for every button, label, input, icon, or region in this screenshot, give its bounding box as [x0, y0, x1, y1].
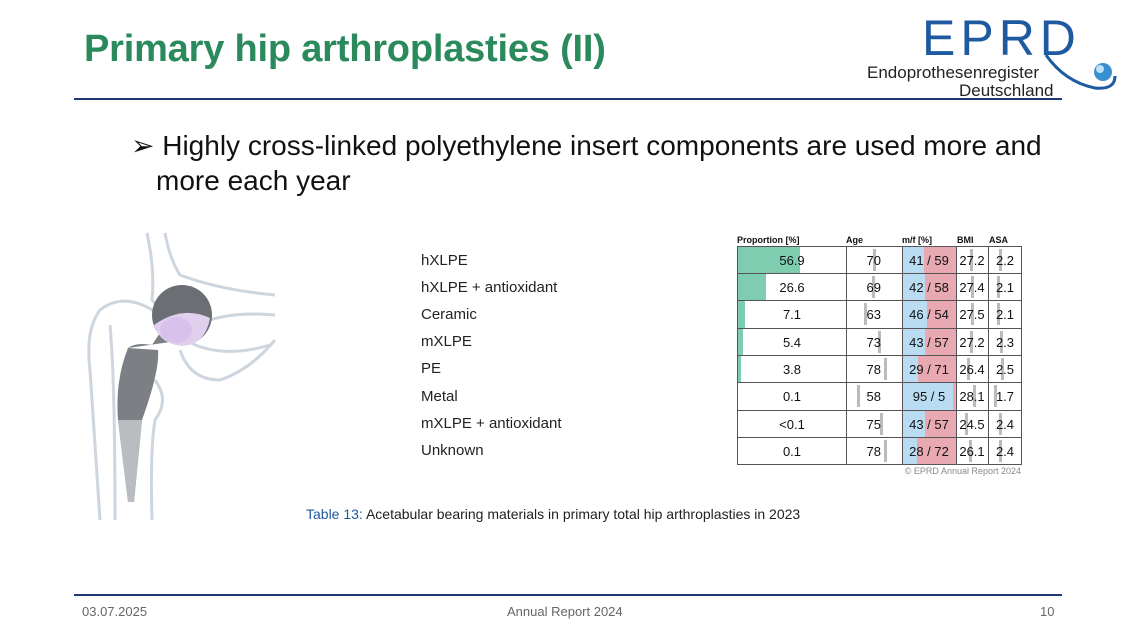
table values: 2.4: [996, 417, 1014, 432]
footer: date: 03.07.2025: [82, 604, 147, 619]
row 8: [884, 437, 1002, 464]
row labels: [421, 252, 562, 459]
row 6: [857, 382, 997, 410]
table: acetabular bearing materials: [421, 235, 1022, 476]
table values: 2.4: [996, 444, 1014, 459]
title: Primary hip arthroplasties (II): [84, 28, 606, 70]
table values: 2.2: [996, 253, 1014, 268]
bullet text: more each year: [156, 165, 351, 196]
column headers: Proportion [%]: [737, 235, 800, 245]
table values: [779, 253, 1014, 459]
stem: [117, 325, 178, 502]
row labels: hXLPE + antioxidant: [421, 279, 558, 296]
bullet text: [131, 130, 1042, 196]
row labels: hXLPE: [421, 252, 468, 269]
table values: 75: [867, 417, 881, 432]
table values: 70: [867, 253, 881, 268]
row 7: [880, 410, 1002, 437]
table values: 46 / 54: [909, 307, 949, 322]
table values: 78: [867, 444, 881, 459]
table values: 7.1: [783, 307, 801, 322]
table values: 27.2: [959, 335, 985, 350]
table values: 27.4: [959, 280, 985, 295]
row 2: [737, 273, 1000, 300]
logo: EPRD: [867, 10, 1116, 100]
data rows: [737, 246, 1004, 464]
row 4: [737, 328, 1003, 355]
table values: 24.5: [959, 417, 985, 432]
table values: 28.1: [959, 389, 985, 404]
table values: 95 / 5: [913, 389, 945, 404]
copyright note: © EPRD Annual Report 2024: [905, 466, 1021, 476]
table values: 2.5: [996, 362, 1014, 377]
footer: report name: Annual Report 2024: [507, 604, 623, 619]
table values: 41 / 59: [909, 253, 949, 268]
table values: <0.1: [779, 417, 805, 432]
table values: 27.2: [959, 253, 985, 268]
row labels: mXLPE: [421, 333, 472, 350]
column headers: ASA: [989, 235, 1009, 245]
row labels: PE: [421, 360, 441, 377]
logo: EPRD: Endoprothesenregister: [867, 63, 1039, 82]
table values: 43 / 57: [909, 417, 949, 432]
table values: 28 / 72: [909, 444, 949, 459]
table values: 2.3: [996, 335, 1014, 350]
table values: 58: [867, 389, 881, 404]
row 1: [737, 246, 1002, 273]
table values: 27.5: [959, 307, 985, 322]
caption: Table 13: Acetabular bearing materials in primary total hip arthroplasties in 2023: [306, 506, 800, 522]
table values: 5.4: [783, 335, 801, 350]
table values: 29 / 71: [909, 362, 949, 377]
table values: 63: [867, 307, 881, 322]
column headers: [737, 235, 1009, 245]
table values: 26.1: [959, 444, 985, 459]
row 3: [737, 300, 1000, 328]
row 5: [737, 355, 1004, 382]
illustration: hip implant: [87, 232, 276, 520]
table values: 26.4: [959, 362, 985, 377]
table values: 42 / 58: [909, 280, 949, 295]
table values: 69: [867, 280, 881, 295]
footer rule: [74, 594, 1062, 596]
table values: 0.1: [783, 389, 801, 404]
logo: EPRD: EPRD: [922, 10, 1081, 66]
row labels: Unknown: [421, 442, 484, 459]
bullet text: ➢ Highly cross-linked polyethylene insert components are used more and: [131, 130, 1042, 161]
table values: 43 / 57: [909, 335, 949, 350]
row labels: Ceramic: [421, 306, 477, 323]
table values: 2.1: [996, 307, 1014, 322]
table values: 26.6: [779, 280, 805, 295]
row labels: mXLPE + antioxidant: [421, 415, 562, 432]
column headers: BMI: [957, 235, 974, 245]
table values: 78: [867, 362, 881, 377]
table values: 0.1: [783, 444, 801, 459]
table values: 1.7: [996, 389, 1014, 404]
table values: 56.9: [779, 253, 805, 268]
column headers: m/f [%]: [902, 235, 932, 245]
table values: 2.1: [996, 280, 1014, 295]
column headers: Age: [846, 235, 863, 245]
header rule: [74, 98, 1062, 100]
footer: page number: 10: [1040, 604, 1054, 619]
logo: EPRD: Deutschland: [959, 81, 1054, 100]
row labels: Metal: [421, 388, 458, 405]
table values: 3.8: [783, 362, 801, 377]
cup: [152, 285, 212, 345]
table values: 73: [867, 335, 881, 350]
